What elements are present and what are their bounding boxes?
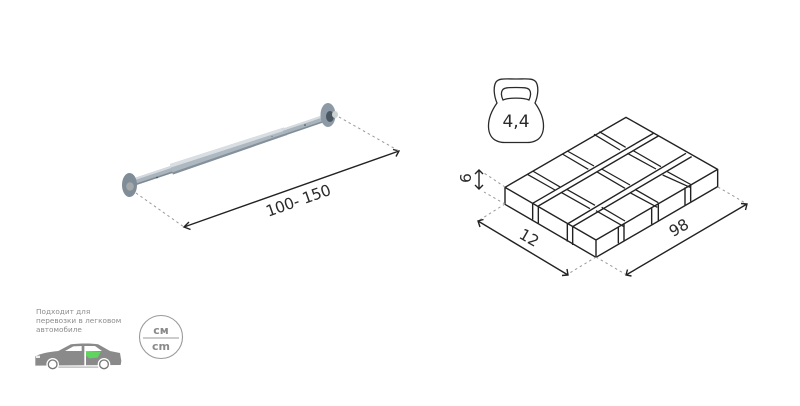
label: 100-150: 100- 150 (264, 181, 333, 221)
dashed guides: rod (136, 117, 399, 227)
strap ends on the sides (533, 185, 691, 245)
icon: unit badge cm: cm (152, 340, 170, 353)
box outline (505, 117, 718, 257)
rod: thin right section (282, 114, 326, 136)
rod: thin left section (133, 166, 174, 186)
dimension: height arrow (475, 170, 483, 189)
rod: thick middle section (170, 128, 287, 174)
car suitability note (36, 307, 124, 334)
icon: unit badge cm: см (153, 324, 169, 337)
car suitability note: Подходит для (36, 307, 90, 316)
green load (86, 352, 101, 358)
car body (35, 343, 121, 366)
car suitability note: перевозки в легковом (36, 316, 121, 325)
long straps on the top (533, 133, 692, 227)
icon: car with green load (35, 343, 121, 371)
icon: unit badge cm (140, 316, 182, 358)
right flange disc (320, 103, 338, 127)
door gap (84, 351, 86, 366)
sill highlight (58, 366, 98, 368)
weight value: 4,4 (502, 112, 530, 132)
car suitability note: автомобиле (36, 325, 82, 334)
cross straps on the top (527, 132, 692, 227)
windows (65, 346, 82, 351)
label: width 12: 12 (516, 225, 542, 251)
front wheel (46, 358, 59, 371)
dimension: width arrow (478, 220, 568, 276)
dimension: rod length arrow (184, 150, 399, 230)
kettlebell weight icon (488, 79, 544, 142)
dimension: length arrow (626, 204, 747, 276)
rear wheel (98, 358, 110, 371)
package box drawing (505, 117, 718, 257)
dashed guides: box (478, 173, 747, 274)
telescopic rod illustration (122, 103, 338, 197)
label: length 98: 98 (666, 215, 692, 241)
label: height 6: 6 (457, 173, 475, 183)
left flange disc (122, 173, 137, 197)
